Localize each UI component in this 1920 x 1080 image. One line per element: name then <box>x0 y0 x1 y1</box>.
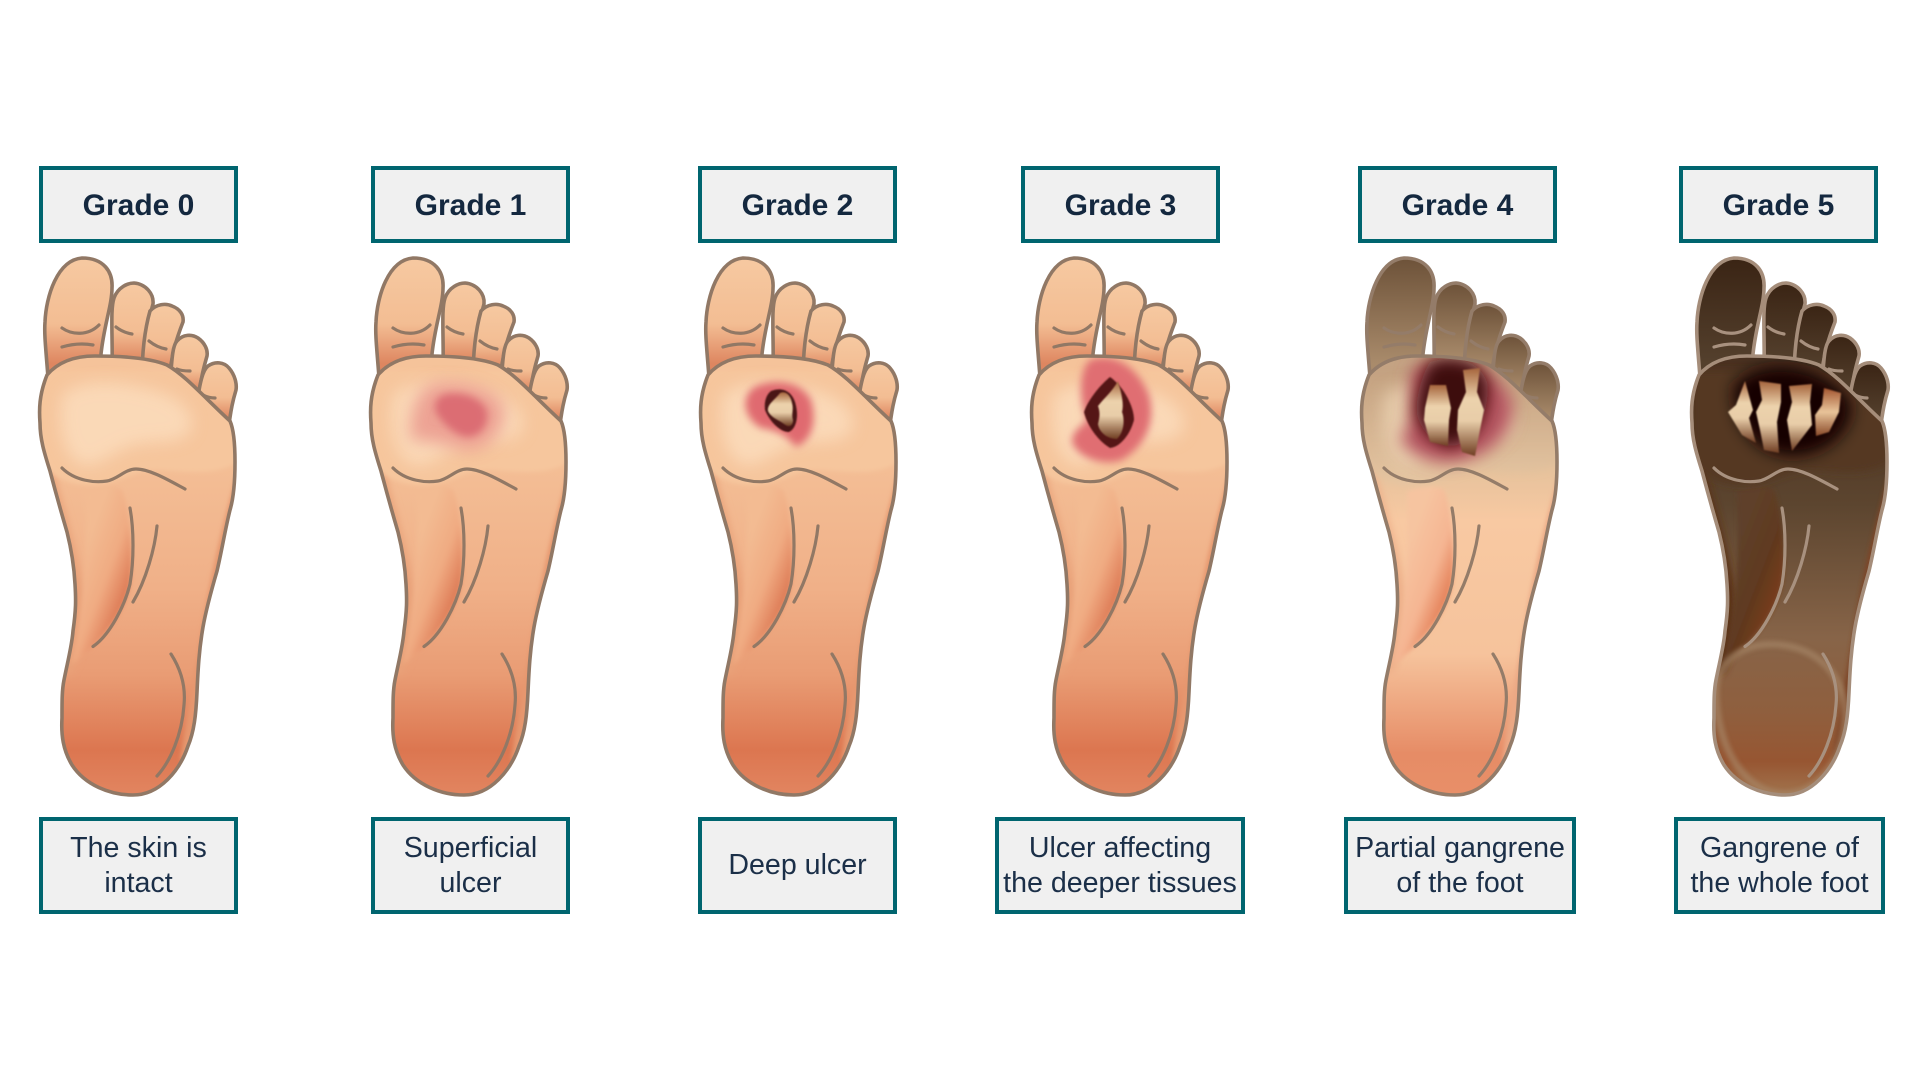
foot: grade 1, superficial ulcer <box>371 258 576 795</box>
caption: grade 5 description: Gangrene of <box>1700 832 1859 864</box>
caption: grade 0 description: The skin is <box>70 832 207 864</box>
exposed bone <box>1098 381 1124 439</box>
necrotic cavity <box>1734 366 1851 456</box>
ulcer cavity <box>1084 377 1134 448</box>
caption: grade 5 description <box>1674 817 1885 914</box>
heading: Grade 3 <box>1021 166 1220 243</box>
heading: Grade 0: Grade 0 <box>83 188 194 222</box>
caption: grade 3 description: Ulcer affecting <box>1029 832 1211 864</box>
heading: Grade 2 <box>698 166 897 243</box>
caption: grade 1 description: Superficial <box>404 832 537 864</box>
caption: grade 1 description <box>371 817 570 914</box>
heading: Grade 3: Grade 3 <box>1065 188 1176 222</box>
heading: Grade 5: Grade 5 <box>1723 188 1834 222</box>
caption: grade 5 description: the whole foot <box>1690 866 1869 898</box>
heading: Grade 4 <box>1358 166 1557 243</box>
foot: grade 2, deep ulcer <box>701 258 906 795</box>
ulcer redness <box>745 382 814 447</box>
ulcer cavity <box>765 389 797 432</box>
heading: Grade 2: Grade 2 <box>742 188 853 222</box>
caption: grade 0 description: intact <box>104 866 173 898</box>
caption: grade 4 description: of the foot <box>1396 866 1524 898</box>
caption: grade 2 description <box>698 817 897 914</box>
foot: grade 5, gangrene of the whole foot <box>1692 258 1897 795</box>
exposed bones <box>1424 368 1484 456</box>
caption: grade 2 description: Deep ulcer <box>728 849 867 881</box>
foot: grade 3, ulcer affecting deeper tissues <box>1032 258 1237 795</box>
ulcer redness <box>1072 358 1151 462</box>
caption: grade 4 description: Partial gangrene <box>1355 832 1565 864</box>
foot: grade 0, intact skin <box>40 258 245 795</box>
caption: grade 4 description <box>1344 817 1576 914</box>
gangrene redness <box>1400 360 1513 462</box>
caption: grade 1 description: ulcer <box>440 866 501 898</box>
exposed bones <box>1728 381 1841 453</box>
necrotic cavity <box>1416 359 1488 447</box>
caption: grade 0 description <box>39 817 238 914</box>
caption: grade 3 description: the deeper tissues <box>1003 866 1237 898</box>
foot: grade 4, partial gangrene <box>1362 258 1567 795</box>
heel rim <box>1716 644 1845 794</box>
heading: Grade 0 <box>39 166 238 243</box>
exposed bone <box>768 392 793 426</box>
heading: Grade 1: Grade 1 <box>415 188 526 222</box>
caption: grade 3 description <box>995 817 1245 914</box>
heading: Grade 4: Grade 4 <box>1402 188 1513 222</box>
heading: Grade 5 <box>1679 166 1878 243</box>
ulcer redness <box>411 382 504 450</box>
heading: Grade 1 <box>371 166 570 243</box>
